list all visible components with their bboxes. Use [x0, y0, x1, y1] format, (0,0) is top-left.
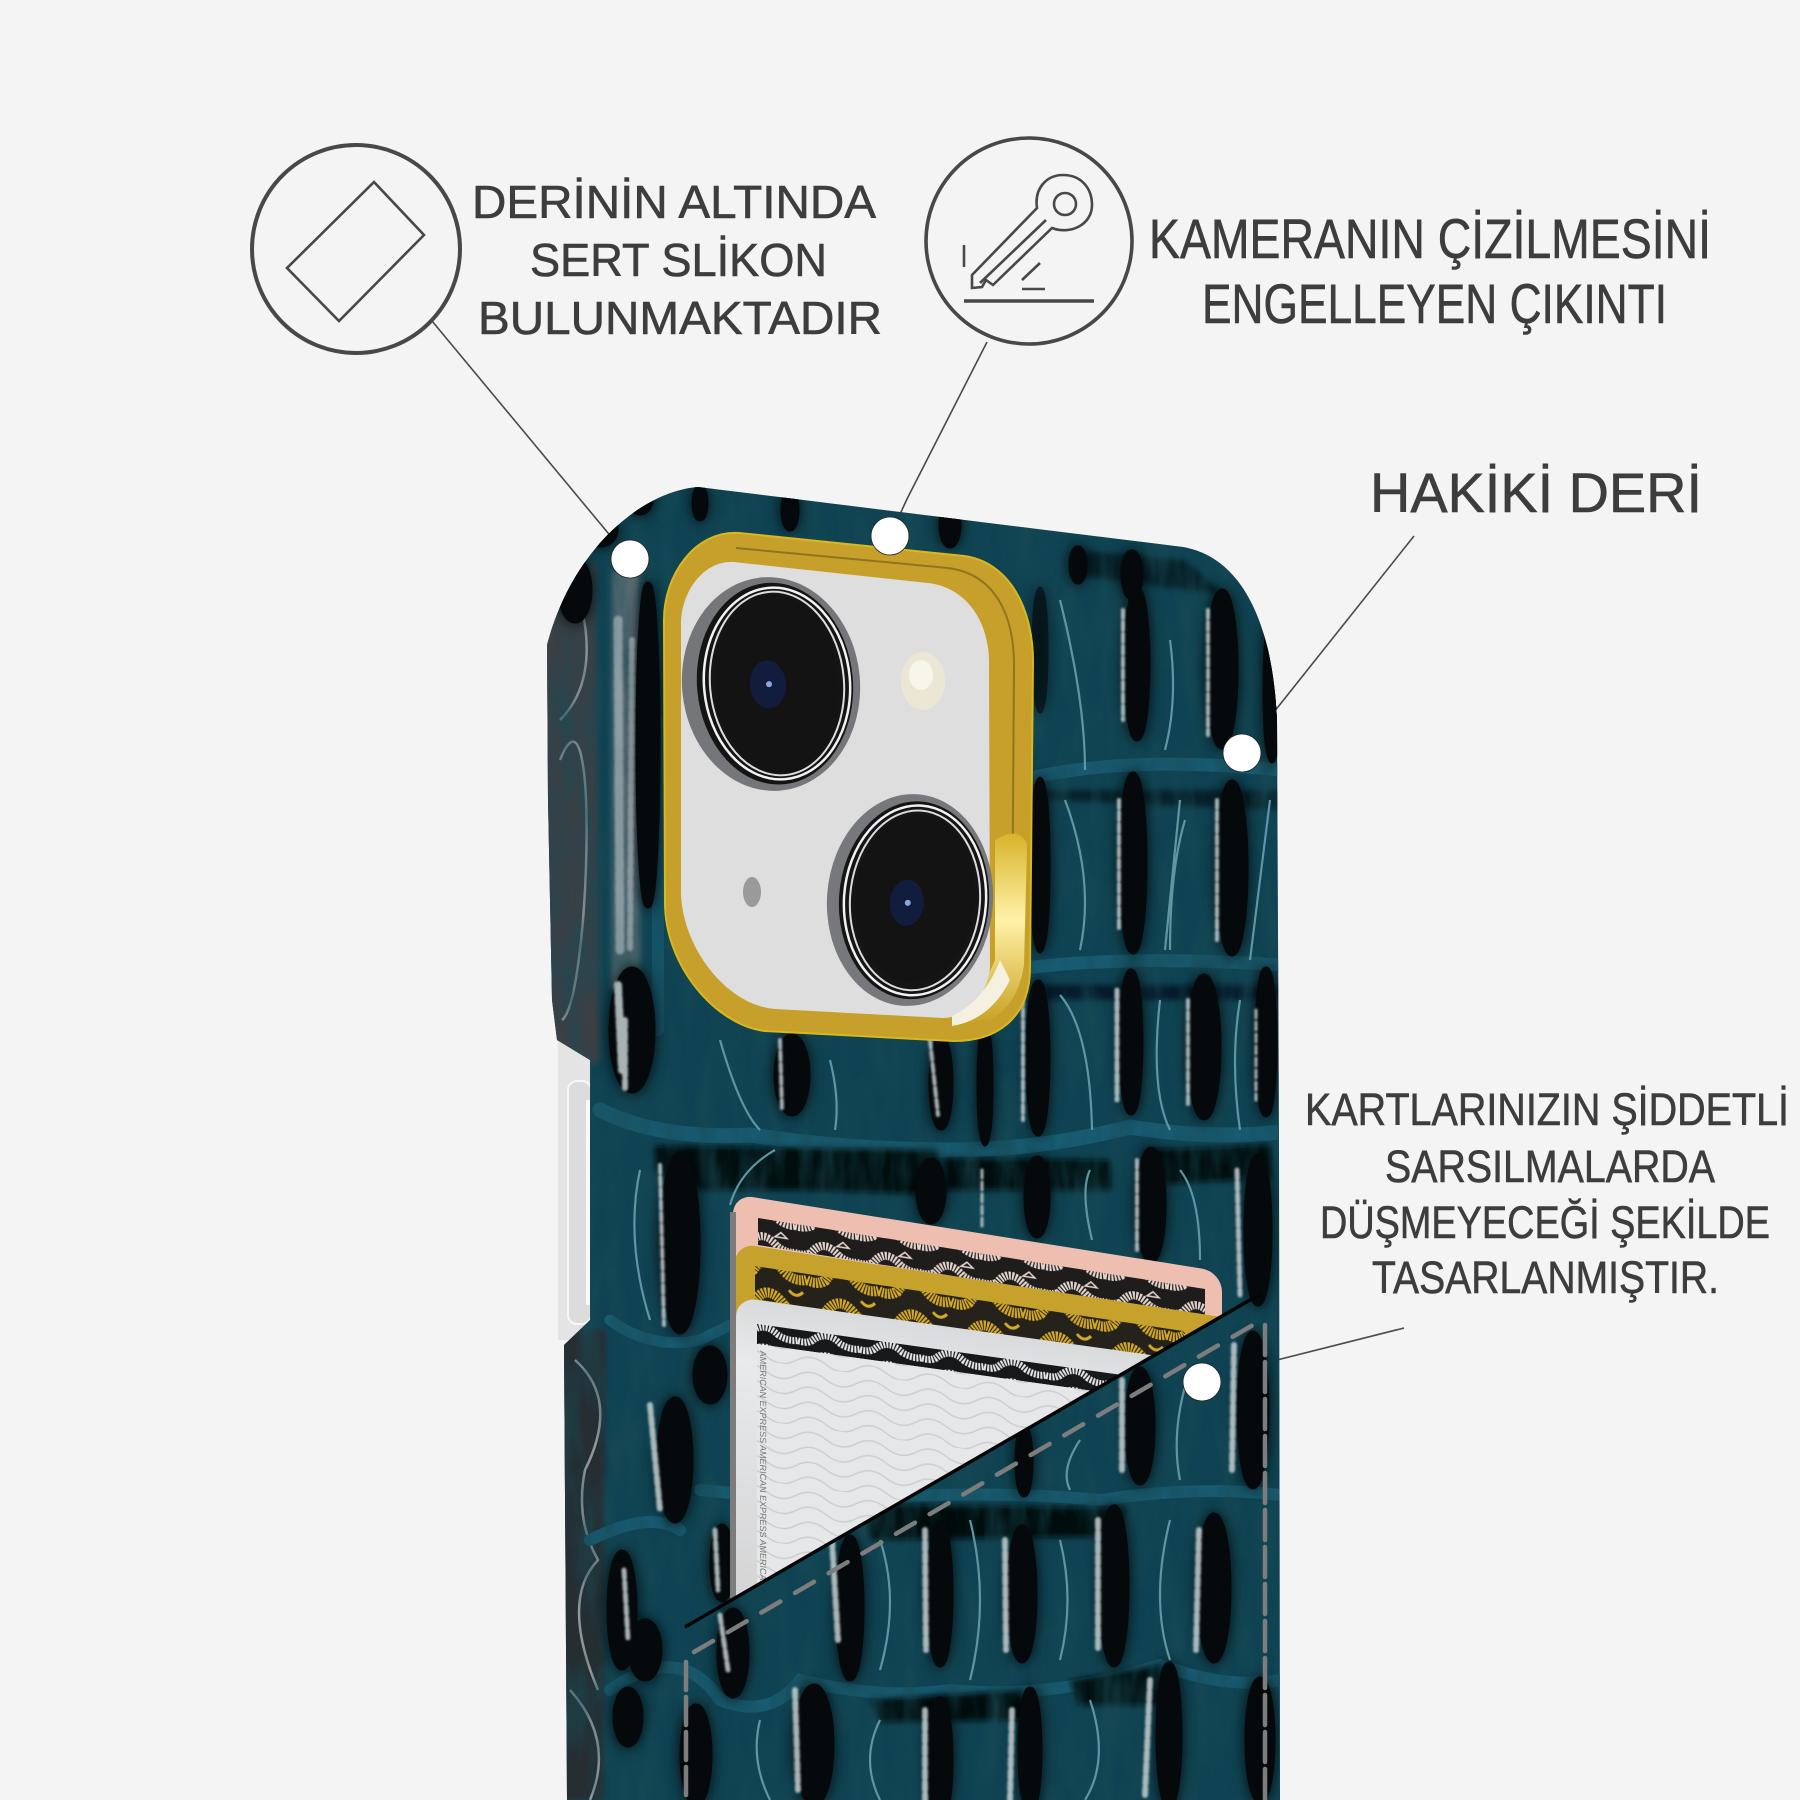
- callout text: silicone: [472, 176, 882, 344]
- silver card: AMERICAN EXPRESS AMERICAN EXPRESS AMERICAN EXPRESS AMERICAN EXPRESS: [758, 1350, 768, 1727]
- callout text: card pocket: TASARLANMIŞTIR.: [1372, 1252, 1719, 1303]
- camera module: [664, 533, 1033, 1041]
- microphone: [743, 877, 761, 907]
- leather back: [540, 480, 1285, 1800]
- leather ridges: [590, 720, 1280, 1707]
- leather slot shadows: [561, 488, 1278, 1800]
- callout text: camera lip: ENGELLEYEN ÇIKINTI: [1202, 272, 1667, 335]
- icon: silicone plate: [252, 145, 460, 353]
- leather dark scale bands: [655, 550, 1280, 1722]
- callout text: camera lip: [1149, 207, 1711, 335]
- leather left grey band: [540, 560, 640, 1800]
- callout text: card pocket: [1305, 1084, 1789, 1303]
- callout text: genuine leather: HAKİKİ DERİ: [1370, 461, 1702, 524]
- callout text: silicone: SERT SLİKON: [530, 234, 827, 286]
- callout text: silicone: DERİNİN ALTINDA: [472, 176, 876, 228]
- side button strip: [558, 1040, 598, 1340]
- callout text: card pocket: SARSILMALARDA: [1385, 1141, 1715, 1192]
- phone case: [540, 480, 1285, 1800]
- icon: key scratch: [926, 138, 1132, 344]
- callout text: silicone: BULUNMAKTADIR: [478, 292, 882, 344]
- lens top: [673, 570, 869, 798]
- stacked cards: [730, 1196, 1222, 1599]
- silver card: [736, 1300, 1152, 1596]
- lens bottom: [820, 788, 1000, 1012]
- leather gloss streaks: [618, 610, 1256, 1800]
- pocket stitching: [686, 1322, 1265, 1800]
- card pocket: [685, 1194, 1265, 1800]
- marker dots: [611, 517, 1261, 1401]
- leather grain: [540, 480, 1285, 1800]
- callout lines: [432, 321, 1414, 1360]
- leather black scale slots: [561, 488, 1278, 1800]
- gold frame: [664, 533, 1033, 1041]
- gold card: [736, 1246, 1218, 1355]
- flash: [901, 652, 945, 710]
- gold highlight: [955, 834, 1027, 1026]
- leather pale veins: [634, 600, 1270, 1800]
- pocket slit: [685, 1293, 1262, 1627]
- camera plate: [681, 562, 990, 1018]
- rose card: [733, 1196, 1222, 1316]
